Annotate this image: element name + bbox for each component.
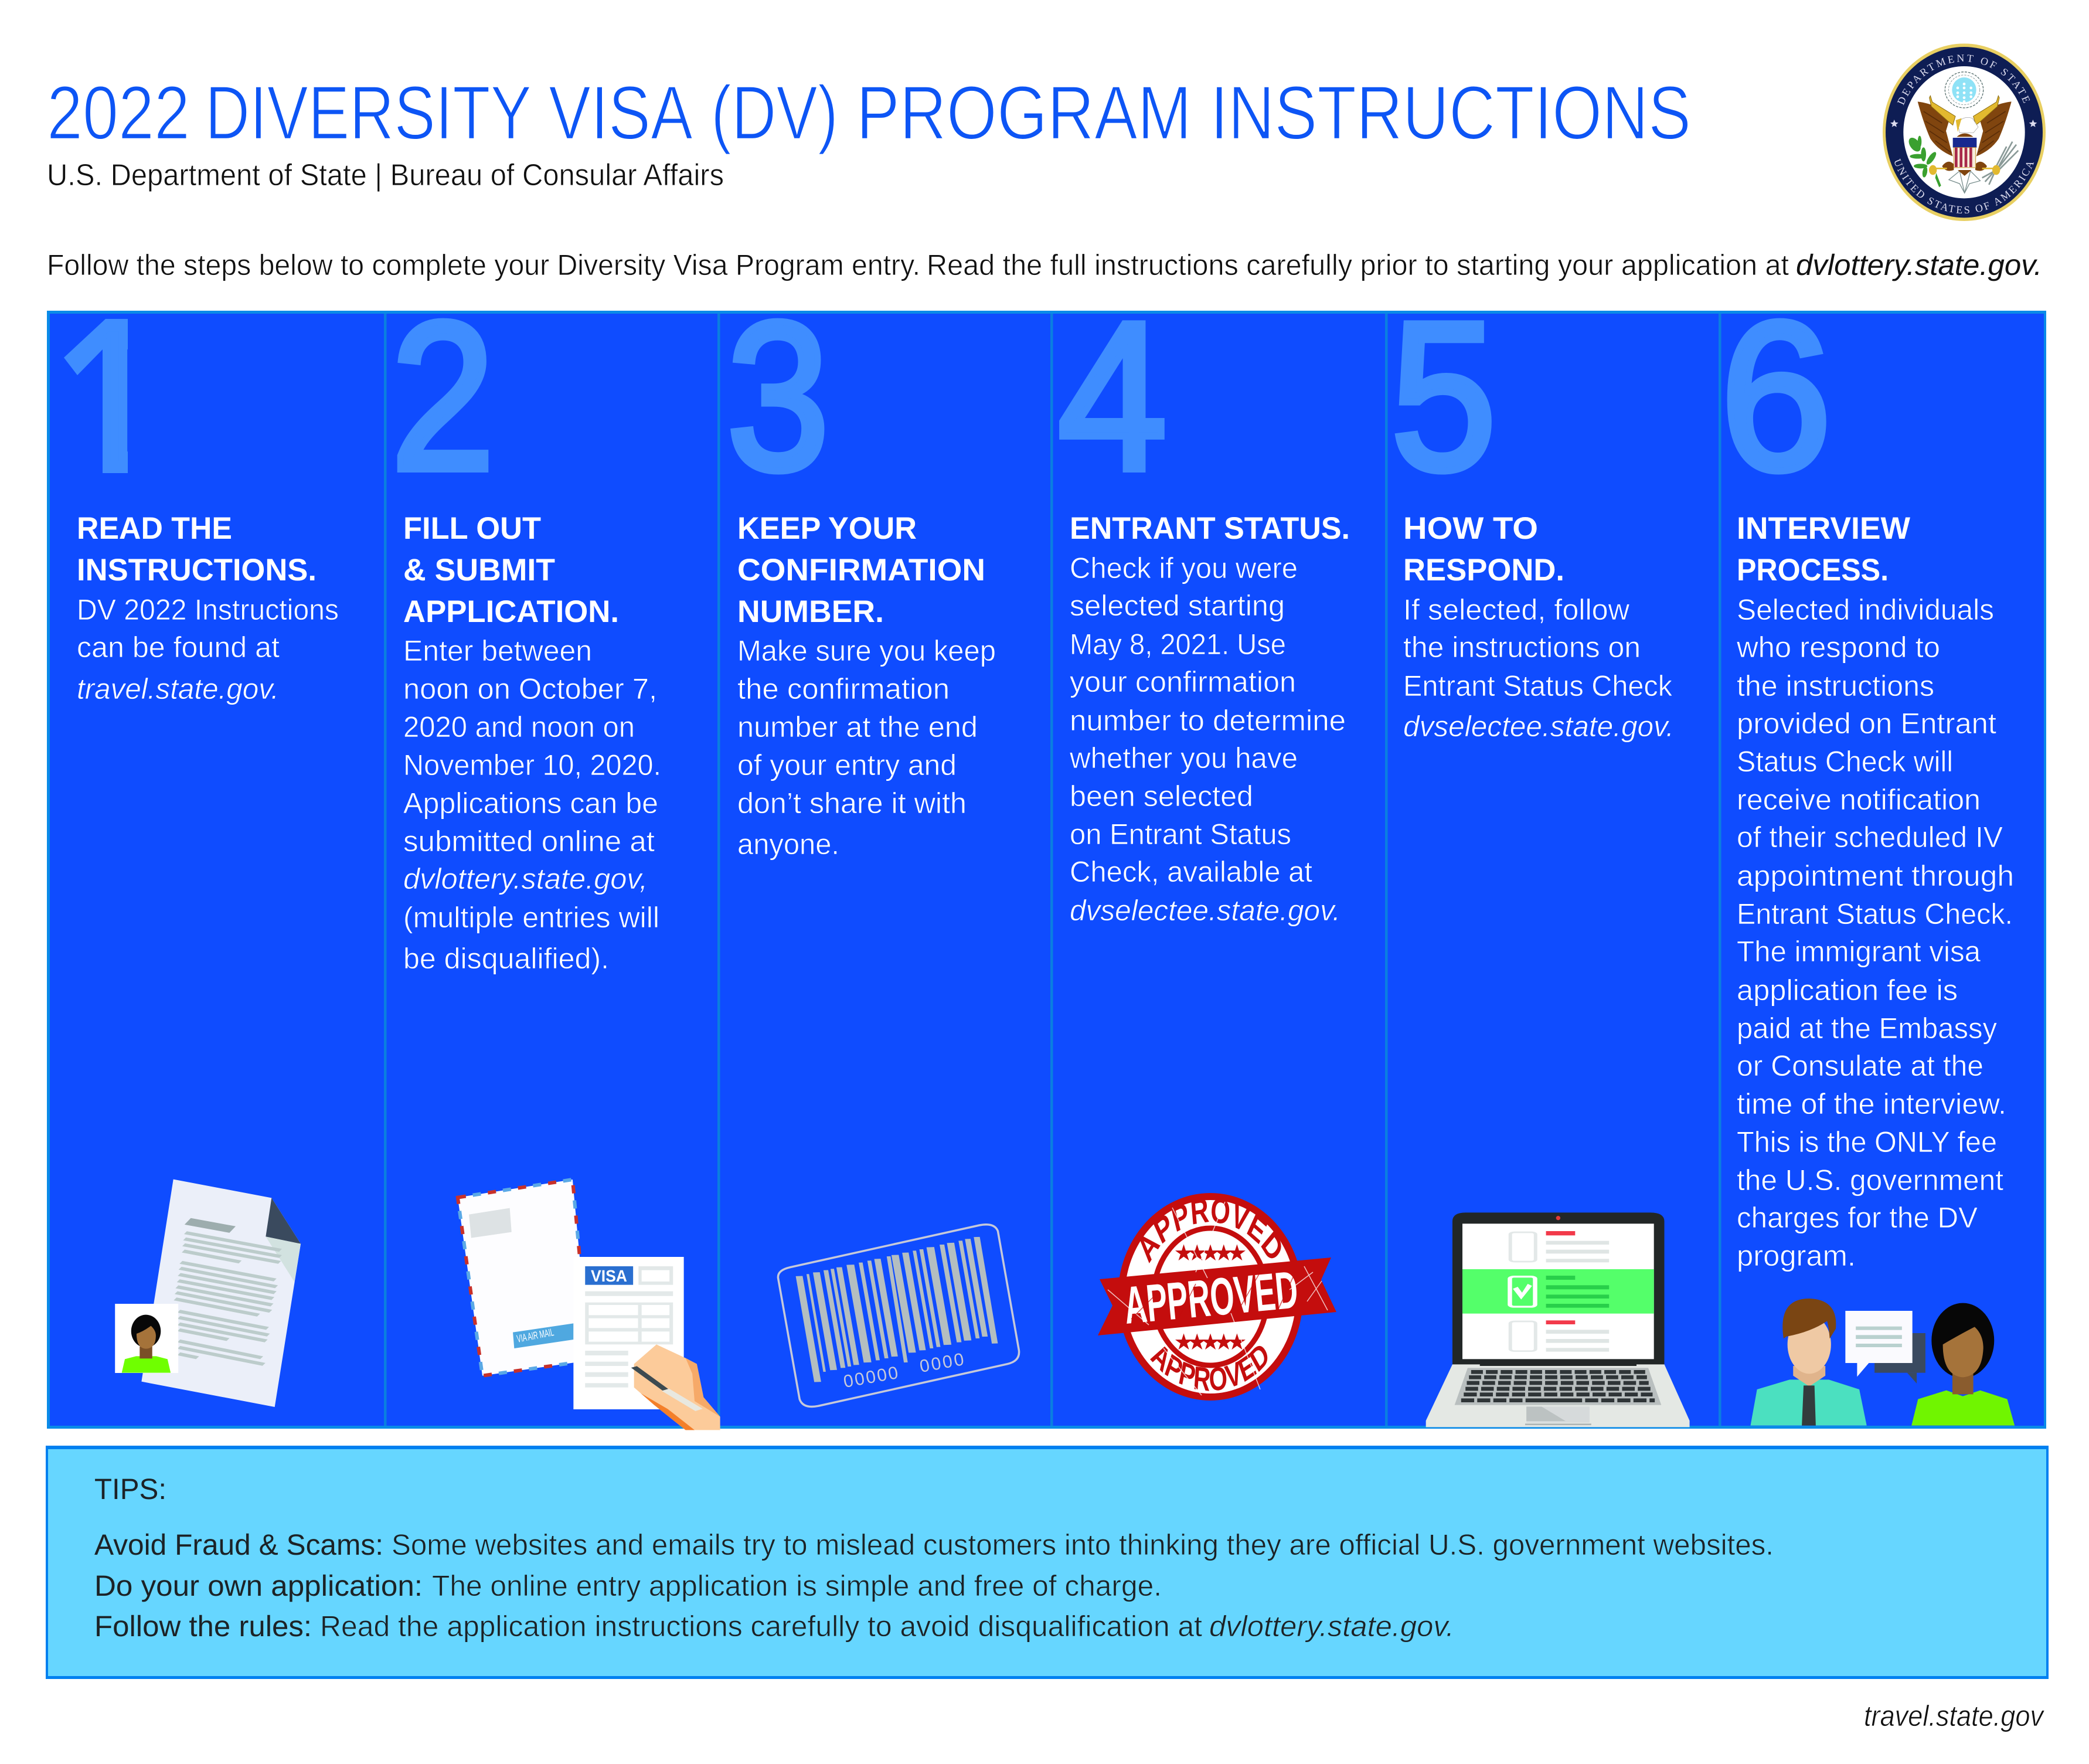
heading: keep your confirmation number: [737, 511, 985, 629]
body text: step 2: dvlottery.state.gov,: [403, 862, 648, 895]
body text: step 3: number at the end: [737, 711, 978, 743]
body text: step 6: appointment through: [1737, 859, 2014, 892]
body text: step 2: submitted online at: [403, 825, 655, 858]
panel: step 6: [1720, 278, 2015, 1426]
heading: how to respond: RESPOND.: [1403, 553, 1564, 587]
body text: step 5: the instructions on: [1403, 631, 1641, 664]
body text: step 1: [77, 593, 339, 705]
body text: step 2: Enter between: [403, 634, 592, 667]
icon: approved stamp: APPROVED: [1141, 1200, 1281, 1263]
eagle head: [1958, 117, 1978, 133]
body text: step 1: DV 2022 Instructions: [77, 593, 339, 626]
footer url: travel.state.gov: [1864, 1700, 2045, 1732]
title: DIVERSITY: [205, 70, 532, 155]
body text: step 6: the instructions: [1737, 669, 1934, 702]
body text: step 6: of their scheduled IV: [1737, 821, 2003, 854]
tip: do your own application: The online entry application is simple and free of charge.: [432, 1569, 1162, 1602]
body text: step 2: [403, 634, 661, 975]
step number 6: 6: [1720, 278, 1832, 514]
wings: [1918, 101, 1953, 157]
body text: step 6: The immigrant visa: [1737, 935, 1981, 968]
body text: step 2: November 10, 2020.: [403, 749, 661, 781]
body text: step 4: Check, available at: [1070, 855, 1312, 888]
icon: approved stamp: [1098, 1193, 1336, 1401]
heading: keep your confirmation number: KEEP YOUR: [737, 511, 917, 546]
intro text: Read the full instructions carefully prior to starting your application at: [927, 249, 1789, 281]
body text: step 3: the confirmation: [737, 672, 950, 705]
icon: approved stamp: ★★★★★: [1173, 1240, 1247, 1266]
tip: do your own application: Do your own application:: [94, 1569, 423, 1602]
body text: step 5: dvselectee.state.gov.: [1403, 710, 1674, 743]
panel: tips: [46, 1446, 2049, 1679]
title: INSTRUCTIONS: [1210, 70, 1691, 155]
body text: step 3: of your entry and: [737, 749, 957, 781]
body text: step 4: number to determine: [1070, 704, 1346, 737]
icon: Department of State seal: [1883, 43, 2046, 221]
panel: step 1: [59, 281, 339, 1407]
step number 1: 1: [59, 281, 164, 517]
tip: follow the rules: Read the application instructions carefully to avoid disqualification at: [320, 1610, 1202, 1643]
step number 4: 4: [1058, 278, 1167, 514]
icon: approved stamp: ★★★★★: [1173, 1329, 1247, 1355]
body text: step 4: [1069, 552, 1346, 927]
intro text: Follow the steps below to complete your Diversity Visa Program entry.: [47, 249, 920, 281]
hand: [634, 1344, 720, 1430]
body text: step 4: May 8, 2021. Use: [1070, 628, 1286, 661]
body text: step 6: time of the interview.: [1737, 1087, 2006, 1120]
icon: two people talking: [1750, 1299, 2015, 1426]
body text: step 1: can be found at: [77, 631, 280, 664]
shield: [1953, 138, 1976, 148]
man: [1750, 1379, 1867, 1426]
body text: step 6: This is the ONLY fee: [1737, 1126, 1997, 1158]
tail feathers: [1949, 171, 1980, 193]
body text: step 3: anyone.: [737, 828, 839, 861]
heading: entrant status: ENTRANT STATUS.: [1070, 511, 1350, 546]
body text: step 4: been selected: [1070, 780, 1253, 813]
title: 2022: [47, 70, 190, 155]
icon: approved stamp: APPROVED: [1121, 1260, 1301, 1335]
talons: [1935, 168, 1947, 169]
heading: keep your confirmation number: NUMBER.: [737, 594, 884, 629]
body text: step 6: charges for the DV: [1737, 1201, 1978, 1234]
icon: barcode: 0000: [918, 1350, 965, 1376]
body text: step 2: noon on October 7,: [403, 672, 657, 705]
heading: interview process: [1737, 511, 1910, 587]
icon: airmail envelope and visa form: VIA AIR MAIL: [516, 1326, 555, 1345]
body text: step 2: be disqualified).: [403, 942, 609, 975]
tip: avoid fraud and scams: Some websites and emails try to mislead customers into thinking they are official U.S. government websites.: [392, 1528, 1774, 1561]
intro text: dvlottery.state.gov.: [1796, 249, 2042, 281]
body text: step 5: Entrant Status Check: [1403, 669, 1673, 702]
title: (DV): [711, 70, 838, 155]
body text: step 4: Check if you were: [1070, 552, 1298, 584]
tip: do your own application: [94, 1569, 1162, 1602]
body text: step 4: whether you have: [1069, 742, 1298, 774]
olive branch: [1906, 135, 1941, 187]
heading: read the instructions: READ THE: [77, 511, 232, 546]
step number 3: 3: [727, 278, 829, 514]
icon: airmail envelope and visa form: [458, 1180, 720, 1430]
scrolls: [1930, 96, 1955, 125]
heading: fill out and submit application: & SUBMIT: [403, 553, 555, 587]
step number 2: 2: [391, 278, 495, 514]
heading: read the instructions: [77, 511, 317, 587]
subtitle: U.S. Department of State | Bureau of Consular Affairs: [47, 158, 724, 192]
title: VISA: [549, 70, 693, 155]
body text: step 5: [1403, 593, 1674, 743]
body text: step 2: 2020 and noon on: [403, 711, 635, 743]
icon: barcode: [778, 1225, 1019, 1406]
tip: follow the rules: [94, 1610, 1454, 1643]
body text: step 6: [1736, 593, 2014, 1272]
body text: step 4: selected starting: [1070, 589, 1285, 622]
step number 1: [64, 319, 128, 473]
constellation cloud: [1945, 72, 1983, 108]
body text: step 6: Entrant Status Check.: [1737, 898, 2013, 930]
heading: fill out and submit application: [403, 511, 619, 629]
title: [47, 70, 1691, 155]
speech bubbles: [1874, 1333, 1925, 1373]
step number 5: 5: [1391, 278, 1496, 514]
body text: step 6: Selected individuals: [1737, 593, 1994, 626]
body text: step 3: Make sure you keep: [737, 634, 996, 667]
tips heading: TIPS:: [94, 1473, 166, 1505]
icon: document with photo: [115, 1180, 301, 1407]
icon: Department of State seal: DEPARTMENT OF STATE: [1897, 55, 2030, 106]
body text: step 6: who respond to: [1736, 631, 1940, 664]
body text: step 3: [737, 634, 996, 861]
body text: step 6: paid at the Embassy: [1737, 1012, 1997, 1045]
heading: read the instructions: INSTRUCTIONS.: [77, 553, 317, 587]
body text: step 6: program.: [1737, 1239, 1856, 1272]
tip: follow the rules: dvlottery.state.gov.: [1209, 1610, 1454, 1643]
arrows: [1982, 142, 2018, 185]
body text: step 6: the U.S. government: [1737, 1164, 2003, 1197]
body text: step 2: Applications can be: [403, 787, 658, 820]
tip: avoid fraud and scams: Avoid Fraud & Scams:: [94, 1528, 383, 1561]
heading: interview process: INTERVIEW: [1737, 511, 1910, 546]
body text: step 4: dvselectee.state.gov.: [1070, 894, 1341, 927]
icon: Department of State seal: UNITED STATES OF AMERICA: [1894, 158, 2034, 213]
icon: airmail envelope and visa form: VISA: [591, 1267, 627, 1285]
title: PROGRAM: [856, 70, 1192, 155]
body text: step 6: receive notification: [1737, 783, 1981, 816]
heading: how to respond: [1403, 511, 1564, 587]
heading: fill out and submit application: FILL OUT: [403, 511, 541, 546]
icon: barcode: 00000: [842, 1363, 900, 1392]
intro text: [47, 249, 2042, 281]
panel: step 2: [391, 278, 720, 1430]
heading: fill out and submit application: APPLICATION.: [403, 594, 619, 629]
panel: step 4: [1058, 278, 1350, 1401]
panel: step 5: [1391, 278, 1690, 1427]
heading: how to respond: HOW TO: [1403, 511, 1538, 546]
body text: step 1: travel.state.gov.: [77, 672, 279, 705]
woman: [1911, 1391, 2015, 1426]
panel: steps background: [47, 311, 2046, 1429]
body text: step 6: application fee is: [1737, 974, 1958, 1007]
heading: interview process: PROCESS.: [1737, 553, 1889, 587]
panel: step 3: [727, 278, 1019, 1406]
body text: step 4: your confirmation: [1070, 665, 1296, 698]
body text: step 6: or Consulate at the: [1737, 1049, 1983, 1082]
icon: laptop with checklist: [1426, 1212, 1690, 1427]
heading: keep your confirmation number: CONFIRMATION: [737, 553, 985, 587]
body text: step 5: If selected, follow: [1403, 593, 1630, 626]
tip: follow the rules: Follow the rules:: [94, 1610, 312, 1643]
icon: approved stamp: APPROVED: [1150, 1346, 1267, 1391]
body text: step 6: provided on Entrant: [1737, 707, 1996, 740]
body text: step 6: Status Check will: [1737, 745, 1953, 778]
body text: step 2: (multiple entries will: [403, 901, 659, 934]
body text: step 4: on Entrant Status: [1070, 818, 1291, 851]
body text: step 3: don’t share it with: [737, 787, 967, 820]
